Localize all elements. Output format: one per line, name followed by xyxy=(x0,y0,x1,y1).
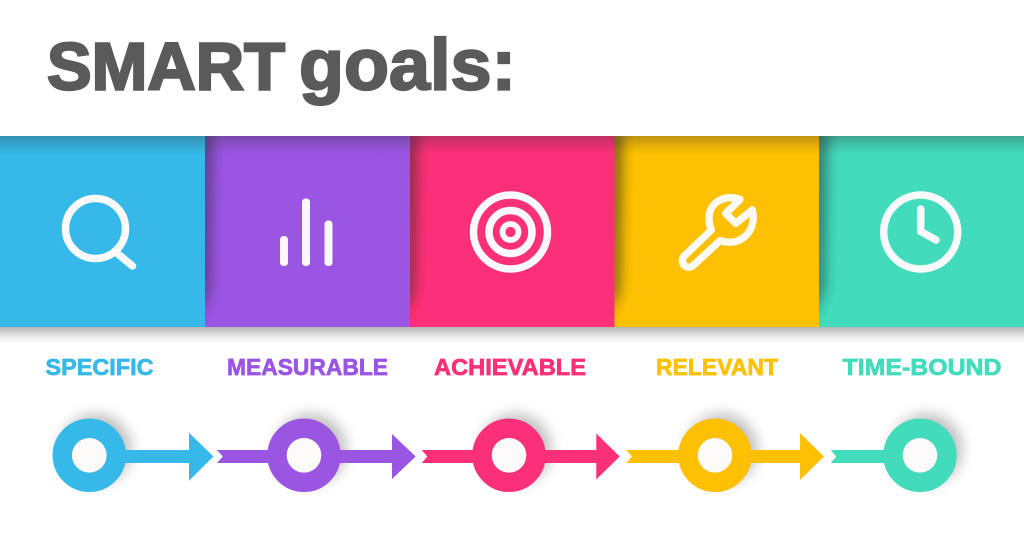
icon: clock xyxy=(884,195,958,269)
arrow tail: time-bound xyxy=(831,450,905,463)
step: measurable xyxy=(217,414,416,484)
step: time-bound xyxy=(831,414,962,484)
arrow: specific xyxy=(120,433,214,481)
title: goals: xyxy=(299,26,516,106)
arrow: relevant xyxy=(626,433,824,480)
panel: measurable xyxy=(198,130,410,327)
label: measurable: MEASURABLE xyxy=(227,354,388,380)
arrow: achievable xyxy=(422,434,620,480)
label: specific: SPECIFIC xyxy=(46,354,154,380)
title: SMART xyxy=(47,30,285,104)
step: relevant xyxy=(626,414,824,484)
label: relevant: RELEVANT xyxy=(656,354,778,380)
panel: time-bound xyxy=(811,130,1024,327)
color band shadow xyxy=(0,327,1024,344)
icon: bar chart xyxy=(280,198,332,266)
title xyxy=(47,26,516,106)
label: achievable: ACHIEVABLE xyxy=(434,354,586,380)
label: time-bound: TIME-BOUND xyxy=(842,354,1002,380)
icon: target xyxy=(474,195,548,269)
step: achievable xyxy=(422,414,620,484)
icon: wrench xyxy=(682,198,753,267)
icon: magnifying glass xyxy=(66,198,132,266)
step: specific xyxy=(61,414,214,484)
panel: achievable xyxy=(403,130,614,327)
panel: relevant xyxy=(607,130,819,327)
arrow: measurable xyxy=(217,434,416,479)
panel: specific xyxy=(0,136,205,327)
